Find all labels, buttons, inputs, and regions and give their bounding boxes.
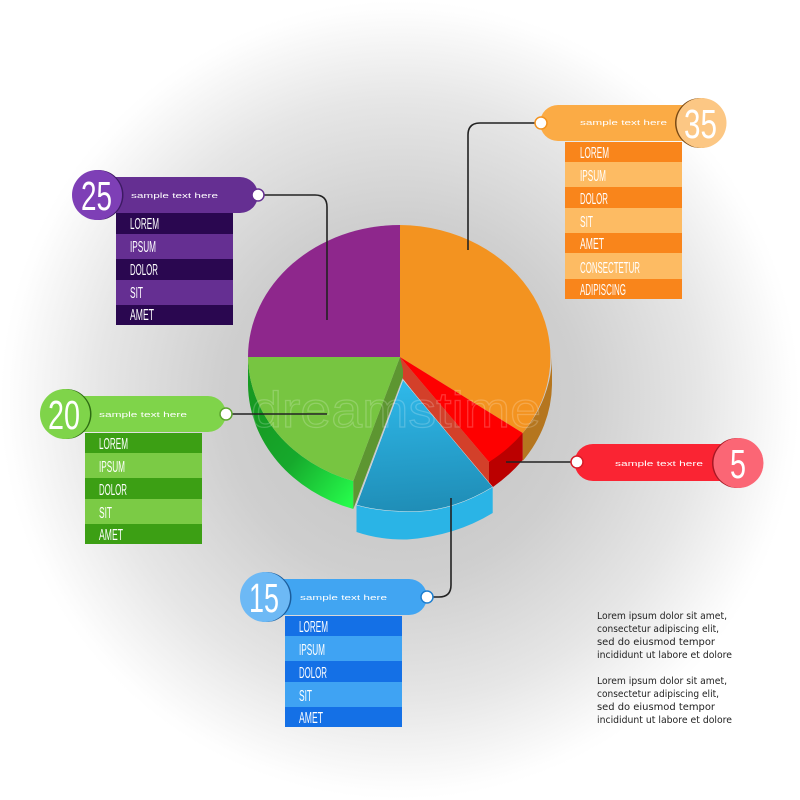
panel: blue 15	[240, 572, 433, 727]
list rows: IPSUM	[99, 459, 125, 476]
tag: sample text here	[300, 593, 387, 602]
number badge	[712, 438, 764, 488]
list rows: DOLOR	[130, 262, 158, 279]
watermark: dreamstime	[251, 382, 541, 438]
list rows: SIT	[299, 688, 312, 705]
slice: red 5	[400, 357, 523, 488]
text block: bottom paragraph: sed do eiusmod tempor	[597, 702, 716, 713]
connector: orange	[468, 123, 536, 250]
text block: top paragraph: incididunt ut labore et dolore	[597, 650, 732, 661]
pie chart	[248, 225, 552, 540]
panel: purple 25	[72, 170, 264, 325]
slice: orange 35	[400, 225, 552, 461]
list rows: SIT	[130, 285, 143, 302]
list rows: SIT	[580, 214, 593, 231]
tag	[535, 105, 690, 141]
list rows: AMET	[99, 527, 123, 544]
text block: top paragraph	[597, 611, 732, 661]
list rows: LOREM	[130, 216, 159, 233]
list rows	[285, 616, 402, 727]
list rows: CONSECTETUR	[580, 260, 640, 277]
list rows: ADIPISCING	[580, 282, 626, 299]
list rows: LOREM	[99, 436, 128, 453]
number badge: 25	[81, 173, 112, 219]
tag	[571, 444, 730, 481]
list rows: AMET	[299, 710, 323, 727]
number badge: 5	[730, 441, 746, 487]
list rows	[85, 433, 202, 544]
text block: bottom paragraph: consectetur adipiscing elit,	[597, 689, 719, 700]
list rows: AMET	[580, 236, 604, 253]
slice: blue 15	[356, 380, 493, 540]
list rows	[116, 213, 233, 325]
number badge: 35	[684, 101, 717, 147]
number badge: 15	[249, 575, 279, 621]
tag: sample text here	[99, 410, 187, 419]
slice: green 20	[248, 357, 403, 509]
text block: top paragraph: sed do eiusmod tempor	[597, 637, 716, 648]
list rows: IPSUM	[299, 642, 325, 659]
panel: orange 35	[535, 98, 726, 299]
tag	[105, 177, 264, 213]
connector: purple	[262, 195, 327, 320]
tag	[75, 396, 232, 432]
list rows: DOLOR	[299, 665, 327, 682]
tag	[275, 579, 433, 615]
list rows: IPSUM	[130, 239, 156, 256]
list rows	[565, 142, 682, 299]
panel: red 5	[571, 438, 764, 488]
connector: blue	[423, 498, 451, 597]
list rows: DOLOR	[580, 191, 608, 208]
text block: top paragraph: Lorem ipsum dolor sit amet,	[597, 611, 727, 622]
tag: sample text here	[615, 459, 703, 468]
list rows: SIT	[99, 505, 112, 522]
text block: bottom paragraph: incididunt ut labore et dolore	[597, 715, 732, 726]
list rows: DOLOR	[99, 482, 127, 499]
number badge: 20	[48, 392, 80, 438]
text block: top paragraph: consectetur adipiscing elit,	[597, 624, 719, 635]
connector: green	[230, 413, 327, 415]
tag: sample text here	[131, 191, 218, 200]
list rows: AMET	[130, 307, 154, 324]
list rows: IPSUM	[580, 168, 606, 185]
list rows: LOREM	[580, 145, 609, 162]
tag: sample text here	[580, 118, 667, 127]
list rows: LOREM	[299, 619, 328, 636]
slice: purple 25	[248, 225, 400, 357]
text block: bottom paragraph: Lorem ipsum dolor sit amet,	[597, 676, 727, 687]
connector: red	[506, 461, 573, 463]
panel: green 20	[40, 389, 232, 544]
text block: bottom paragraph	[597, 676, 732, 726]
